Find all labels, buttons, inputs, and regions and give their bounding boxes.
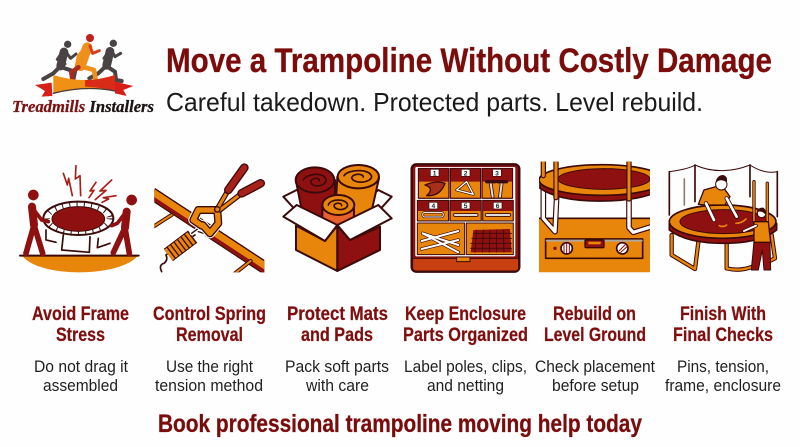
column 4 text: Label poles, clips, [404,357,527,376]
icon: numbered parts organizer: 5 [464,203,468,210]
logo: Treadmills Installers [12,34,154,116]
column 2 text [155,357,263,395]
call to action: Book professional trampoline moving help today [158,410,642,438]
icon: numbered parts organizer: 6 [496,203,500,210]
column 5 text [535,357,655,395]
subtitle: Careful takedown. Protected parts. Level rebuild. [166,87,703,117]
icon: numbered parts organizer [412,164,519,272]
column 6 text: frame, enclosure [665,376,781,395]
column 5 text: Check placement [535,357,655,376]
icon: final check of trampoline [669,165,777,270]
column 5 heading: Rebuild on [553,304,636,325]
column 4 text: and netting [427,376,504,395]
logo wordmark: Treadmills Installers [12,97,154,116]
column 1 text: Do not drag it [34,357,128,376]
icon: numbered parts organizer: 3 [495,170,499,177]
icon: numbered parts organizer: 1 [433,170,437,177]
column 6 heading: Finish With [680,304,766,325]
column 2 text: Use the right [166,357,253,376]
column 4 text [404,357,527,395]
icon: pliers on spring [152,168,268,274]
icon: people lifting trampoline [20,166,139,272]
column 1 heading [32,304,129,346]
column 4 heading: Keep Enclosure [405,304,526,325]
column 3 text [285,357,389,395]
column 4 heading [403,304,528,346]
column 1 text: assembled [43,376,118,395]
icon: trampoline on level ground [539,162,650,272]
column 6 text [665,357,781,395]
column 3 text: Pack soft parts [285,357,389,376]
column 4 heading: Parts Organized [403,325,528,346]
column 3 heading: Protect Mats [287,304,388,325]
column 5 heading: Level Ground [544,325,646,346]
column 6 heading [673,304,773,346]
column 5 heading [544,304,646,346]
column 2 text: tension method [155,376,263,395]
column 6 text: Pins, tension, [677,357,769,376]
icon: centre runner [71,34,101,83]
column 3 heading: and Pads [301,325,373,346]
column 2 heading: Removal [176,325,243,346]
column 1 heading: Stress [56,325,105,346]
column 2 heading [153,304,266,346]
column 3 text: with care [305,376,369,395]
column 1 text [34,357,128,395]
icon: left runner [43,41,76,80]
column 5 text: before setup [552,376,639,395]
icon: numbered parts organizer: 2 [464,170,468,177]
column 2 heading: Control Spring [153,304,266,325]
column 1 heading: Avoid Frame [32,304,129,325]
column 6 heading: Final Checks [673,325,773,346]
icon: box of rolled mats [283,165,392,271]
column 3 heading [287,304,388,346]
icon: numbered parts organizer: 4 [431,203,435,210]
icon: right runner [89,40,122,81]
icon: ribbon [35,75,133,97]
